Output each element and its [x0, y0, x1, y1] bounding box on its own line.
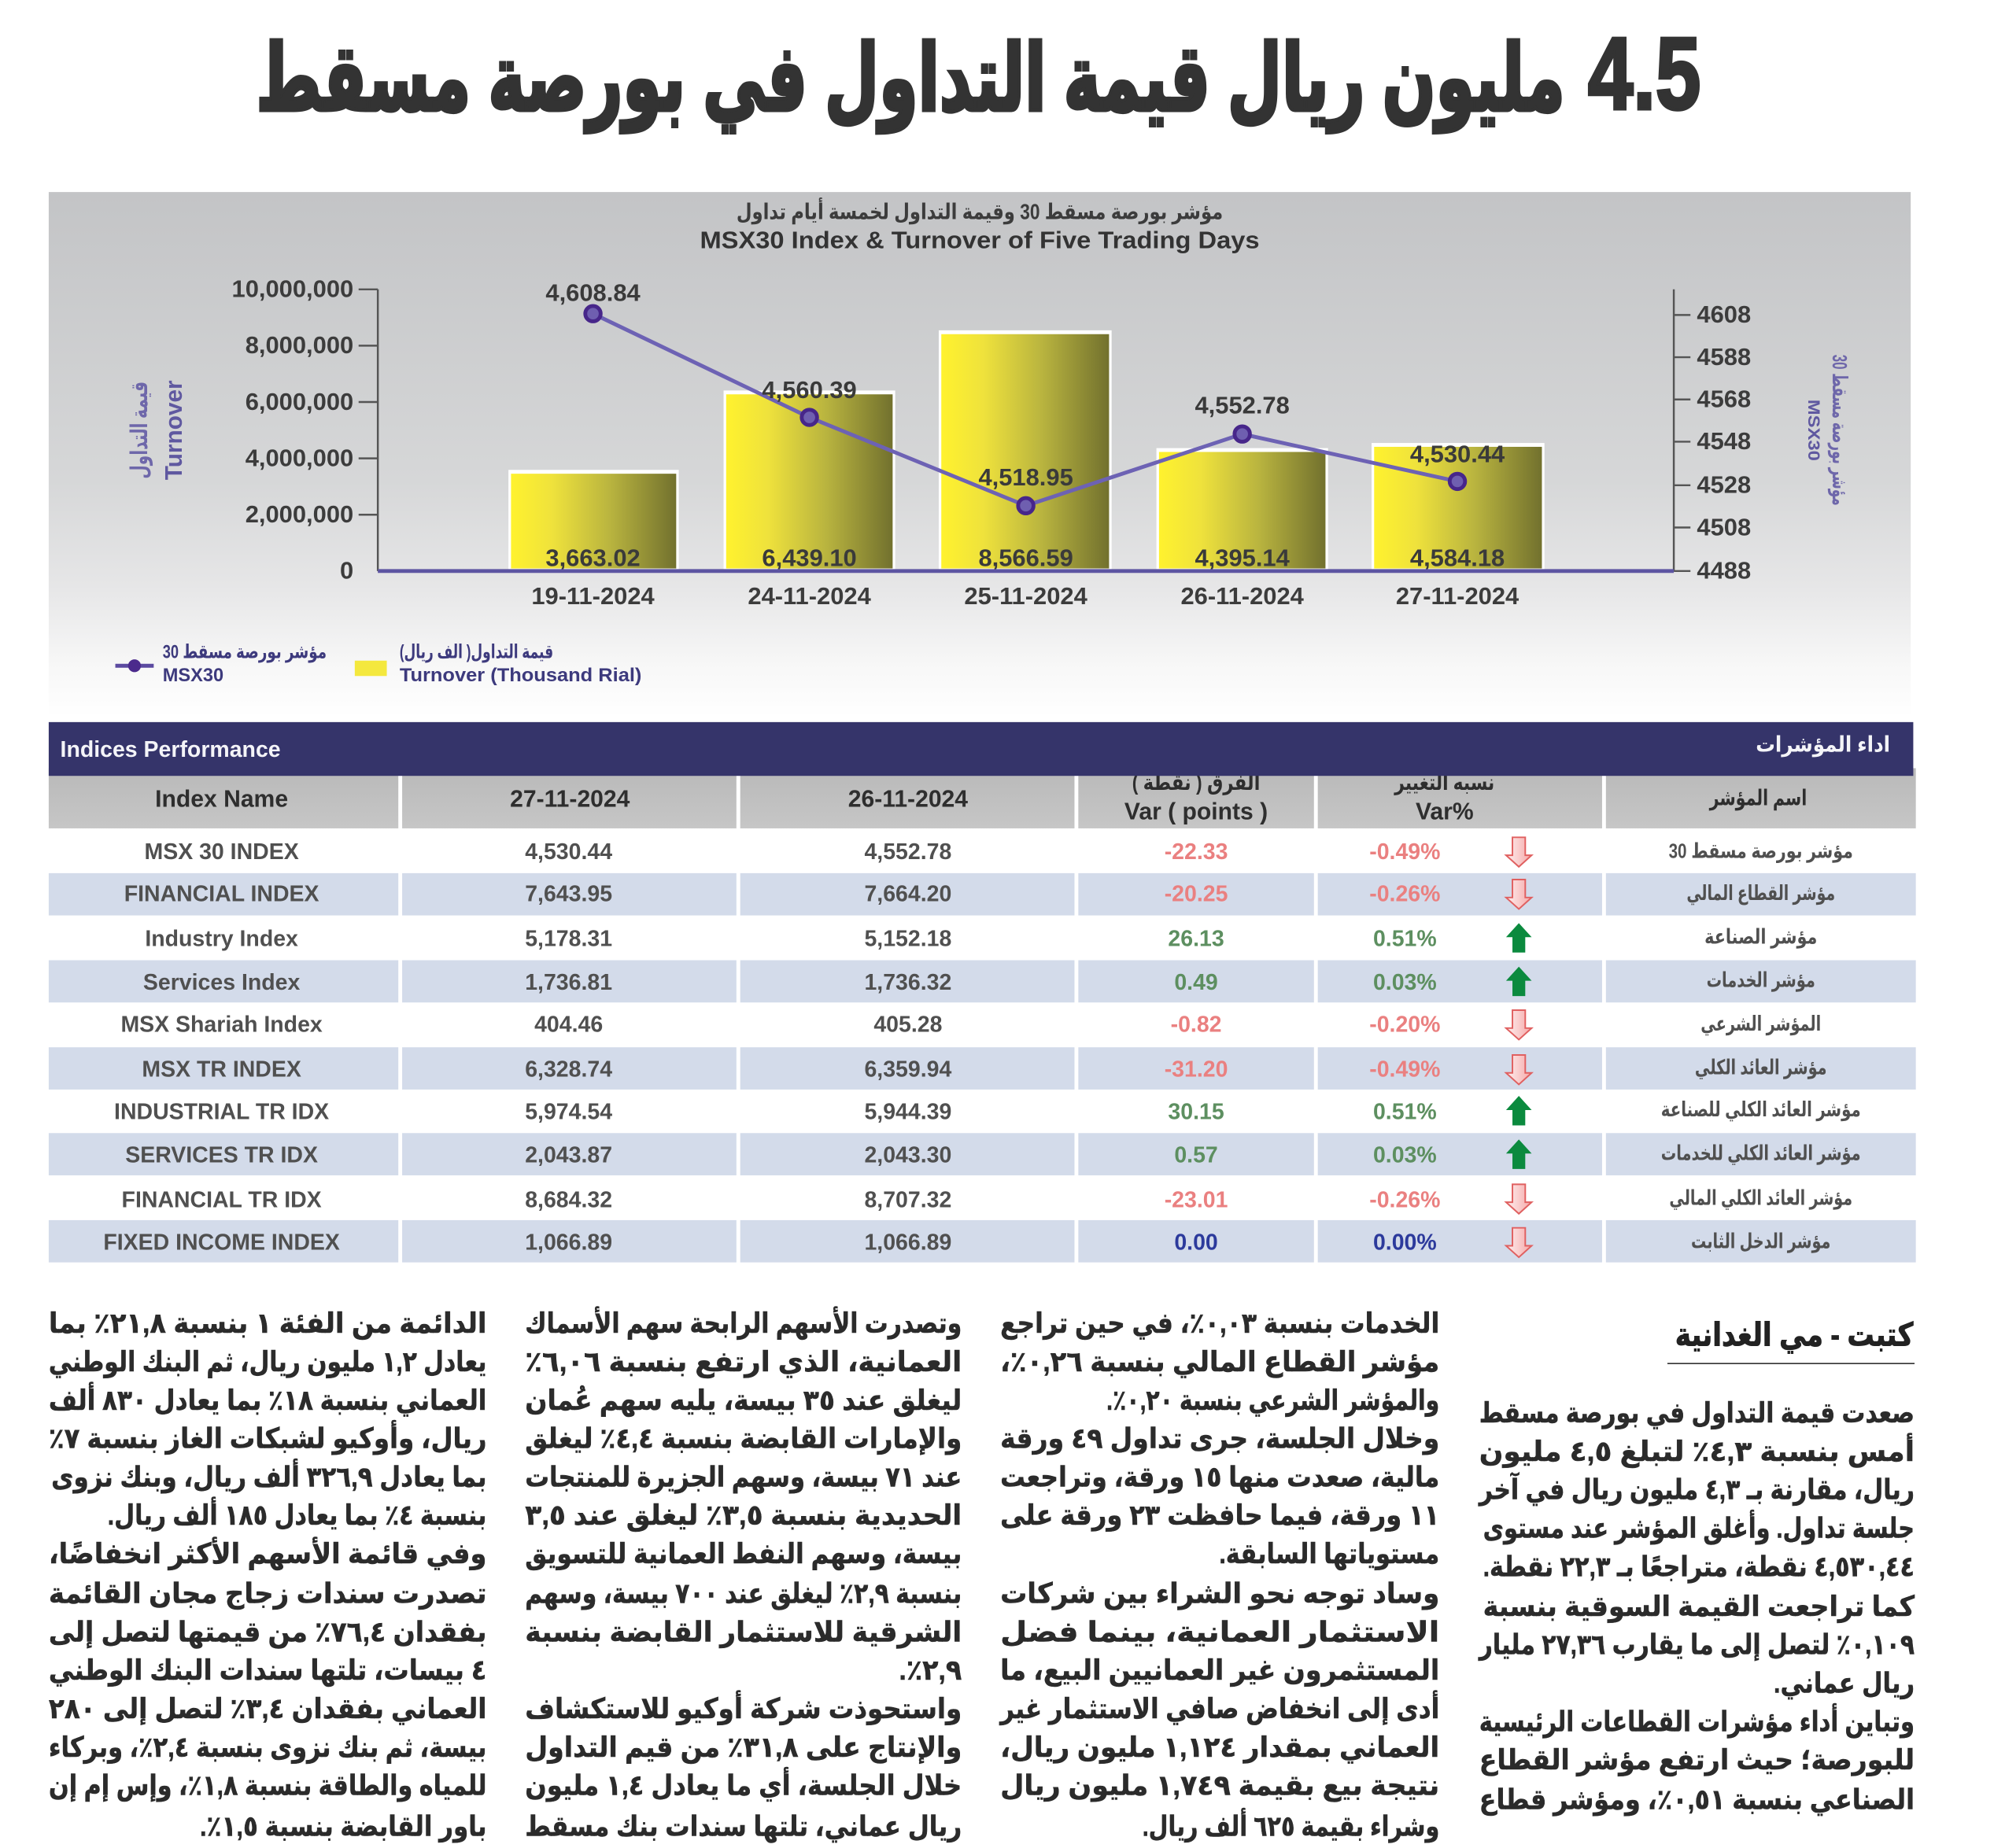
line values: 4,530.44 — [1410, 440, 1505, 467]
row: MSX TR INDEX: -31.20 — [1165, 1057, 1228, 1083]
row: MSX TR INDEX — [142, 1055, 1827, 1084]
title: 4.5 — [1588, 16, 1700, 131]
text column 4: ٤ بيسات، تلتها سندات البنك الوطني — [49, 1654, 486, 1687]
row: Services Index: Services Index — [143, 970, 300, 995]
text column 2: وساد توجه نحو الشراء بين شركات — [1000, 1578, 1439, 1610]
legend: Turnover (Thousand Rial) — [400, 665, 641, 685]
text column 4: بما يعادل ٣٢٦,٩ ألف ريال، وبنك نزوى — [51, 1458, 486, 1493]
text column 2: وخلال الجلسة، جرى تداول ٤٩ ورقة — [1000, 1423, 1439, 1455]
row: FIXED INCOME INDEX: 1,066.89 — [864, 1230, 951, 1255]
row: MSX Shariah Index: -0.20% — [1369, 1013, 1440, 1038]
table header row: اسم المؤشر — [1708, 786, 1807, 811]
text column 4: الدائمة من الفئة ١ بنسبة ٢١,٨٪ بما — [49, 1308, 486, 1340]
text column 3: والإمارات القابضة بنسبة ٤,٤٪ ليغلق — [525, 1423, 962, 1455]
row: FINANCIAL TR IDX: -0.26% — [1369, 1188, 1440, 1213]
row: Industry Index: 26.13 — [1168, 927, 1224, 952]
left axis turnover: 2,000,000 — [246, 500, 353, 528]
row: Industry Index: مؤشر الصناعة — [1704, 924, 1817, 949]
right axis index: 4488 — [1697, 557, 1751, 585]
row: Industry Index — [145, 923, 1817, 953]
legend — [116, 641, 641, 685]
text column 3: الحديدية بنسبة ٣,٥٪ ليغلق عند ٣,٥ — [525, 1499, 962, 1532]
row: MSX TR INDEX: 6,328.74 — [525, 1057, 612, 1083]
bar values: 8,566.59 — [978, 544, 1073, 571]
row: MSX Shariah Index: MSX Shariah Index — [120, 1013, 323, 1038]
right axis title: مؤشر بورصة مسقط 30 — [1827, 355, 1852, 506]
row: Industry Index: Industry Index — [145, 927, 298, 952]
text column 2: الخدمات بنسبة ٠,٠٣٪، في حين تراجع — [1000, 1308, 1439, 1340]
text column 4: يعادل ١,٢ مليون ريال، ثم البنك الوطني — [49, 1346, 486, 1378]
text column 1: ٤,٥٣٠,٤٤ نقطة، متراجعًا بـ ٢٢,٣ نقطة. — [1483, 1551, 1915, 1583]
text column 2: مستوياتها السابقة. — [1219, 1538, 1439, 1570]
text column 2: نتيجة بيع بقيمة ١,٧٤٩ مليون ريال — [1000, 1770, 1439, 1802]
line values: 4,560.39 — [762, 376, 857, 404]
text column 4: بنسبة ٤٪ بما يعادل ١٨٥ ألف ريال. — [108, 1496, 486, 1532]
right axis index: 4568 — [1697, 385, 1751, 413]
legend: MSX30 — [163, 665, 223, 685]
left axis title — [127, 380, 187, 480]
right axis title — [1804, 355, 1852, 506]
row: INDUSTRIAL TR IDX — [114, 1096, 1861, 1125]
row: MSX 30 INDEX: MSX 30 INDEX — [145, 839, 299, 865]
text column 4: باور القابضة بنسبة ١,٥٪. — [200, 1811, 486, 1843]
left axis title: قيمة التداول — [127, 382, 153, 479]
text column 2: أدى إلى انخفاض صافي الاستثمار غير — [999, 1690, 1439, 1725]
row: FINANCIAL INDEX: FINANCIAL INDEX — [124, 882, 319, 907]
text column 2: المستثمرون غير العمانيين البيع، ما — [1000, 1654, 1439, 1687]
row: Industry Index: 5,152.18 — [864, 927, 951, 952]
text column 2: والمؤشر الشرعي بنسبة ٠,٢٠٪. — [1106, 1385, 1439, 1417]
bar values: 4,584.18 — [1410, 544, 1505, 571]
row: MSX Shariah Index: 405.28 — [873, 1013, 942, 1038]
text column 2: وشراء بقيمة ٦٢٥ ألف ريال. — [1143, 1808, 1439, 1843]
date labels: 27-11-2024 — [1396, 582, 1520, 610]
row: SERVICES TR IDX: 0.57 — [1174, 1143, 1218, 1168]
row: INDUSTRIAL TR IDX: 5,974.54 — [525, 1099, 612, 1124]
row: FIXED INCOME INDEX: FIXED INCOME INDEX — [103, 1230, 340, 1255]
row: MSX TR INDEX: 6,359.94 — [864, 1057, 951, 1083]
line: MSX30 index — [585, 306, 1465, 514]
text column 2: مؤشر القطاع المالي بنسبة ٠,٢٦٪، — [1000, 1346, 1439, 1378]
bar values: 6,439.10 — [762, 544, 857, 571]
byline: كتبت - مي الغدانية — [1675, 1316, 1914, 1353]
text column 1: ريال عماني. — [1774, 1667, 1915, 1699]
text column 4: للمياه والطاقة بنسبة ١,٨٪، وإس إم إن — [49, 1770, 486, 1802]
row: Services Index: 0.49 — [1174, 970, 1218, 995]
text column 4: بفقدان ٧٦,٤٪ من قيمتها لتصل إلى — [49, 1616, 486, 1648]
line values: 4,608.84 — [545, 278, 641, 306]
row: FINANCIAL TR IDX: 8,684.32 — [525, 1188, 612, 1213]
table header row: نسبه التغيير — [1394, 770, 1494, 795]
left axis turnover: 4,000,000 — [246, 444, 353, 471]
text column 3: ٢,٩٪. — [899, 1654, 962, 1686]
row: MSX 30 INDEX: -0.49% — [1369, 839, 1440, 865]
text column 3: ليغلق عند ٣٥ بيسة، يليه سهم عُمان — [525, 1385, 962, 1417]
text column 3: بيسة، وسهم النفط العمانية للتسويق — [525, 1538, 962, 1570]
text column 4: بيسة، ثم بنك نزوى بنسبة ٢,٤٪، وبركاء — [49, 1732, 486, 1764]
left axis turnover: 0 — [340, 557, 353, 585]
chart title: مؤشر بورصة مسقط 30 وقيمة التداول لخمسة أيام تداول — [737, 197, 1223, 224]
text column 3: والإنتاج على ٣١,٨٪ من قيم التداول — [525, 1732, 962, 1764]
row: MSX 30 INDEX: مؤشر بورصة مسقط 30 — [1669, 839, 1853, 863]
right axis index — [1674, 290, 1751, 585]
row: Services Index: مؤشر الخدمات — [1707, 968, 1815, 993]
bars: turnover — [508, 330, 1545, 570]
row: MSX 30 INDEX — [145, 837, 1853, 867]
table header row: 26-11-2024 — [848, 786, 968, 812]
row: FINANCIAL TR IDX: 8,707.32 — [864, 1188, 951, 1213]
row: INDUSTRIAL TR IDX: مؤشر العائد الكلي للصناعة — [1661, 1097, 1861, 1122]
row: FINANCIAL INDEX: مؤشر القطاع المالي — [1686, 881, 1835, 906]
row: SERVICES TR IDX: 2,043.30 — [864, 1143, 951, 1168]
text column 2: العماني بمقدار ١,١٢٤ مليون ريال، — [1000, 1732, 1439, 1764]
row: INDUSTRIAL TR IDX: 5,944.39 — [864, 1099, 951, 1124]
row: SERVICES TR IDX — [125, 1139, 1861, 1169]
row: INDUSTRIAL TR IDX: 0.51% — [1373, 1099, 1437, 1124]
row: MSX Shariah Index — [120, 1010, 1821, 1039]
text column 1: ٠,١٠٩٪ لتصل إلى ما يقارب ٢٧,٣٦ مليار — [1478, 1629, 1915, 1662]
row: MSX TR INDEX: -0.49% — [1369, 1057, 1440, 1083]
table row stripes — [49, 873, 1916, 1263]
text column 2 — [999, 1308, 1439, 1843]
text column 2: مالية، صعدت منها ١٥ ورقة، وتراجعت — [1000, 1461, 1439, 1493]
text column 3: واستحوذت شركة أوكيو للاستكشاف — [525, 1690, 962, 1725]
text column 4: العماني بفقدان ٣,٤٪ لتصل إلى ٢٨٠ — [49, 1693, 486, 1725]
text column 3: عند ٧١ بيسة، وسهم الجزيرة للمنتجات — [525, 1461, 962, 1493]
chart title — [700, 197, 1260, 254]
table title band — [49, 722, 1913, 776]
row: FIXED INCOME INDEX: 1,066.89 — [525, 1230, 612, 1255]
row: MSX Shariah Index: 404.46 — [534, 1013, 603, 1038]
row: Services Index: 0.03% — [1373, 970, 1437, 995]
row: SERVICES TR IDX: 0.03% — [1373, 1143, 1437, 1168]
right axis index: 4528 — [1697, 471, 1751, 499]
row: FIXED INCOME INDEX: 0.00% — [1373, 1230, 1437, 1255]
row: FINANCIAL INDEX — [124, 880, 1835, 909]
left axis turnover — [232, 275, 378, 585]
text column 4: تصدرت سندات زجاج مجان القائمة — [49, 1578, 486, 1610]
text column 1 — [1478, 1397, 1915, 1817]
date labels — [531, 582, 1520, 610]
table title band: اداء المؤشرات — [1756, 732, 1890, 757]
row: FIXED INCOME INDEX — [103, 1228, 1830, 1257]
row: FIXED INCOME INDEX: مؤشر الدخل الثابت — [1691, 1230, 1830, 1254]
line values: 4,518.95 — [978, 463, 1073, 491]
chart title: MSX30 Index & Turnover of Five Trading Days — [700, 227, 1260, 254]
row: SERVICES TR IDX: 2,043.87 — [525, 1143, 612, 1168]
text column 4 — [49, 1308, 486, 1843]
row: INDUSTRIAL TR IDX: INDUSTRIAL TR IDX — [114, 1099, 329, 1124]
row: MSX Shariah Index: -0.82 — [1171, 1013, 1222, 1038]
text column 3: ريال عماني، تلتها سندات بنك مسقط — [525, 1811, 962, 1843]
left axis turnover: 10,000,000 — [232, 275, 353, 303]
row: FIXED INCOME INDEX: 0.00 — [1174, 1230, 1218, 1255]
left axis turnover: 6,000,000 — [246, 388, 353, 415]
line values: 4,552.78 — [1195, 392, 1290, 419]
date labels: 19-11-2024 — [531, 582, 655, 610]
baseline — [378, 570, 1674, 572]
table header row: Index Name — [155, 786, 288, 812]
row: MSX Shariah Index: المؤشر الشرعي — [1700, 1012, 1821, 1036]
text column 1: صعدت قيمة التداول في بورصة مسقط — [1479, 1397, 1915, 1429]
row: MSX 30 INDEX: -22.33 — [1165, 839, 1228, 865]
row: MSX TR INDEX: MSX TR INDEX — [142, 1057, 301, 1083]
row: SERVICES TR IDX: SERVICES TR IDX — [125, 1143, 318, 1168]
bar values: 3,663.02 — [545, 544, 641, 571]
row: FINANCIAL TR IDX — [122, 1184, 1852, 1214]
row: Services Index: 1,736.81 — [525, 970, 612, 995]
text column 3: بنسبة ٢,٩٪ ليغلق عند ٧٠٠ بيسة، وسهم — [525, 1578, 962, 1610]
right axis title: MSX30 — [1804, 400, 1822, 461]
right axis index: 4548 — [1697, 427, 1751, 455]
row: FINANCIAL TR IDX: -23.01 — [1165, 1188, 1228, 1213]
text column 4: ريال، وأوكيو لشبكات الغاز بنسبة ٧٪ — [49, 1420, 486, 1455]
legend: مؤشر بورصة مسقط 30 — [163, 641, 327, 662]
text column 1: للبورصة؛ حيث ارتفع مؤشر القطاع — [1479, 1744, 1915, 1776]
row: INDUSTRIAL TR IDX: 30.15 — [1168, 1099, 1224, 1124]
row: FINANCIAL INDEX: -20.25 — [1165, 882, 1228, 907]
text column 1: كما تراجعت القيمة السوقية بنسبة — [1483, 1591, 1915, 1623]
row: Services Index: 1,736.32 — [864, 970, 951, 995]
right axis index: 4608 — [1697, 301, 1751, 328]
row: Industry Index: 5,178.31 — [525, 927, 612, 952]
text column 3: الشرقية للاستثمار القابضة بنسبة — [525, 1616, 962, 1648]
row: SERVICES TR IDX: مؤشر العائد الكلي للخدمات — [1661, 1141, 1861, 1165]
legend: قيمة التداول( الف ريال) — [400, 641, 553, 662]
row: MSX 30 INDEX: 4,530.44 — [525, 839, 612, 865]
text column 4: وفي قائمة الأسهم الأكثر انخفاضًا، — [49, 1536, 486, 1570]
left axis turnover: 8,000,000 — [246, 331, 353, 359]
row: MSX 30 INDEX: 4,552.78 — [864, 839, 951, 865]
row: Services Index — [143, 967, 1815, 996]
text column 1: الصناعي بنسبة ٠,٥١٪، ومؤشر قطاع — [1479, 1784, 1915, 1817]
text column 3: خلال الجلسة، أي ما يعادل ١,٤ مليون — [525, 1767, 962, 1802]
table header row: Var% — [1416, 799, 1474, 825]
row: FINANCIAL INDEX: 7,664.20 — [864, 882, 951, 907]
row: FINANCIAL TR IDX: FINANCIAL TR IDX — [122, 1188, 322, 1213]
row: MSX TR INDEX: مؤشر العائد الكلي — [1695, 1055, 1827, 1079]
date labels: 25-11-2024 — [964, 582, 1088, 610]
bar values — [545, 544, 1505, 571]
row: Industry Index: 0.51% — [1373, 927, 1437, 952]
bar values: 4,395.14 — [1195, 544, 1291, 571]
line values — [545, 278, 1505, 491]
row: FINANCIAL TR IDX: مؤشر العائد الكلي المالي — [1669, 1186, 1852, 1210]
date labels: 24-11-2024 — [748, 582, 872, 610]
right axis index: 4588 — [1697, 343, 1751, 371]
row: FINANCIAL INDEX: 7,643.95 — [525, 882, 612, 907]
table header row: 27-11-2024 — [510, 786, 630, 812]
table header row: Var ( points ) — [1124, 799, 1268, 825]
table header row: الفرق ( نقطة ) — [1132, 770, 1260, 795]
left axis title: Turnover — [160, 380, 187, 480]
panel: MSX30 chart — [49, 192, 1911, 717]
text column 2: الاستثمار العمانية، بينما فضل — [1000, 1616, 1439, 1648]
text column 2: ١١ ورقة، فيما حافظت ٢٣ ورقة على — [1000, 1499, 1439, 1532]
panel: indices table — [49, 722, 1916, 1263]
text column 3: العمانية، الذي ارتفع بنسبة ٦,٠٦٪ — [525, 1346, 962, 1378]
right axis index: 4508 — [1697, 513, 1751, 540]
text column 4: العماني بنسبة ١٨٪ بما يعادل ٨٣٠ ألف — [49, 1381, 486, 1417]
table header row — [49, 768, 1916, 828]
text column 3: وتصدرت الأسهم الرابحة سهم الأسماك — [525, 1305, 962, 1340]
text column 1: أمس بنسبة ٤,٣٪ لتبلغ ٤,٥ مليون — [1479, 1433, 1915, 1468]
text column 1: ريال، مقارنة بـ ٤,٣ مليون ريال في آخر — [1478, 1472, 1915, 1507]
row: FINANCIAL INDEX: -0.26% — [1369, 882, 1440, 907]
text column 3 — [525, 1305, 962, 1843]
table title band: Indices Performance — [61, 737, 281, 762]
date labels: 26-11-2024 — [1180, 582, 1305, 610]
